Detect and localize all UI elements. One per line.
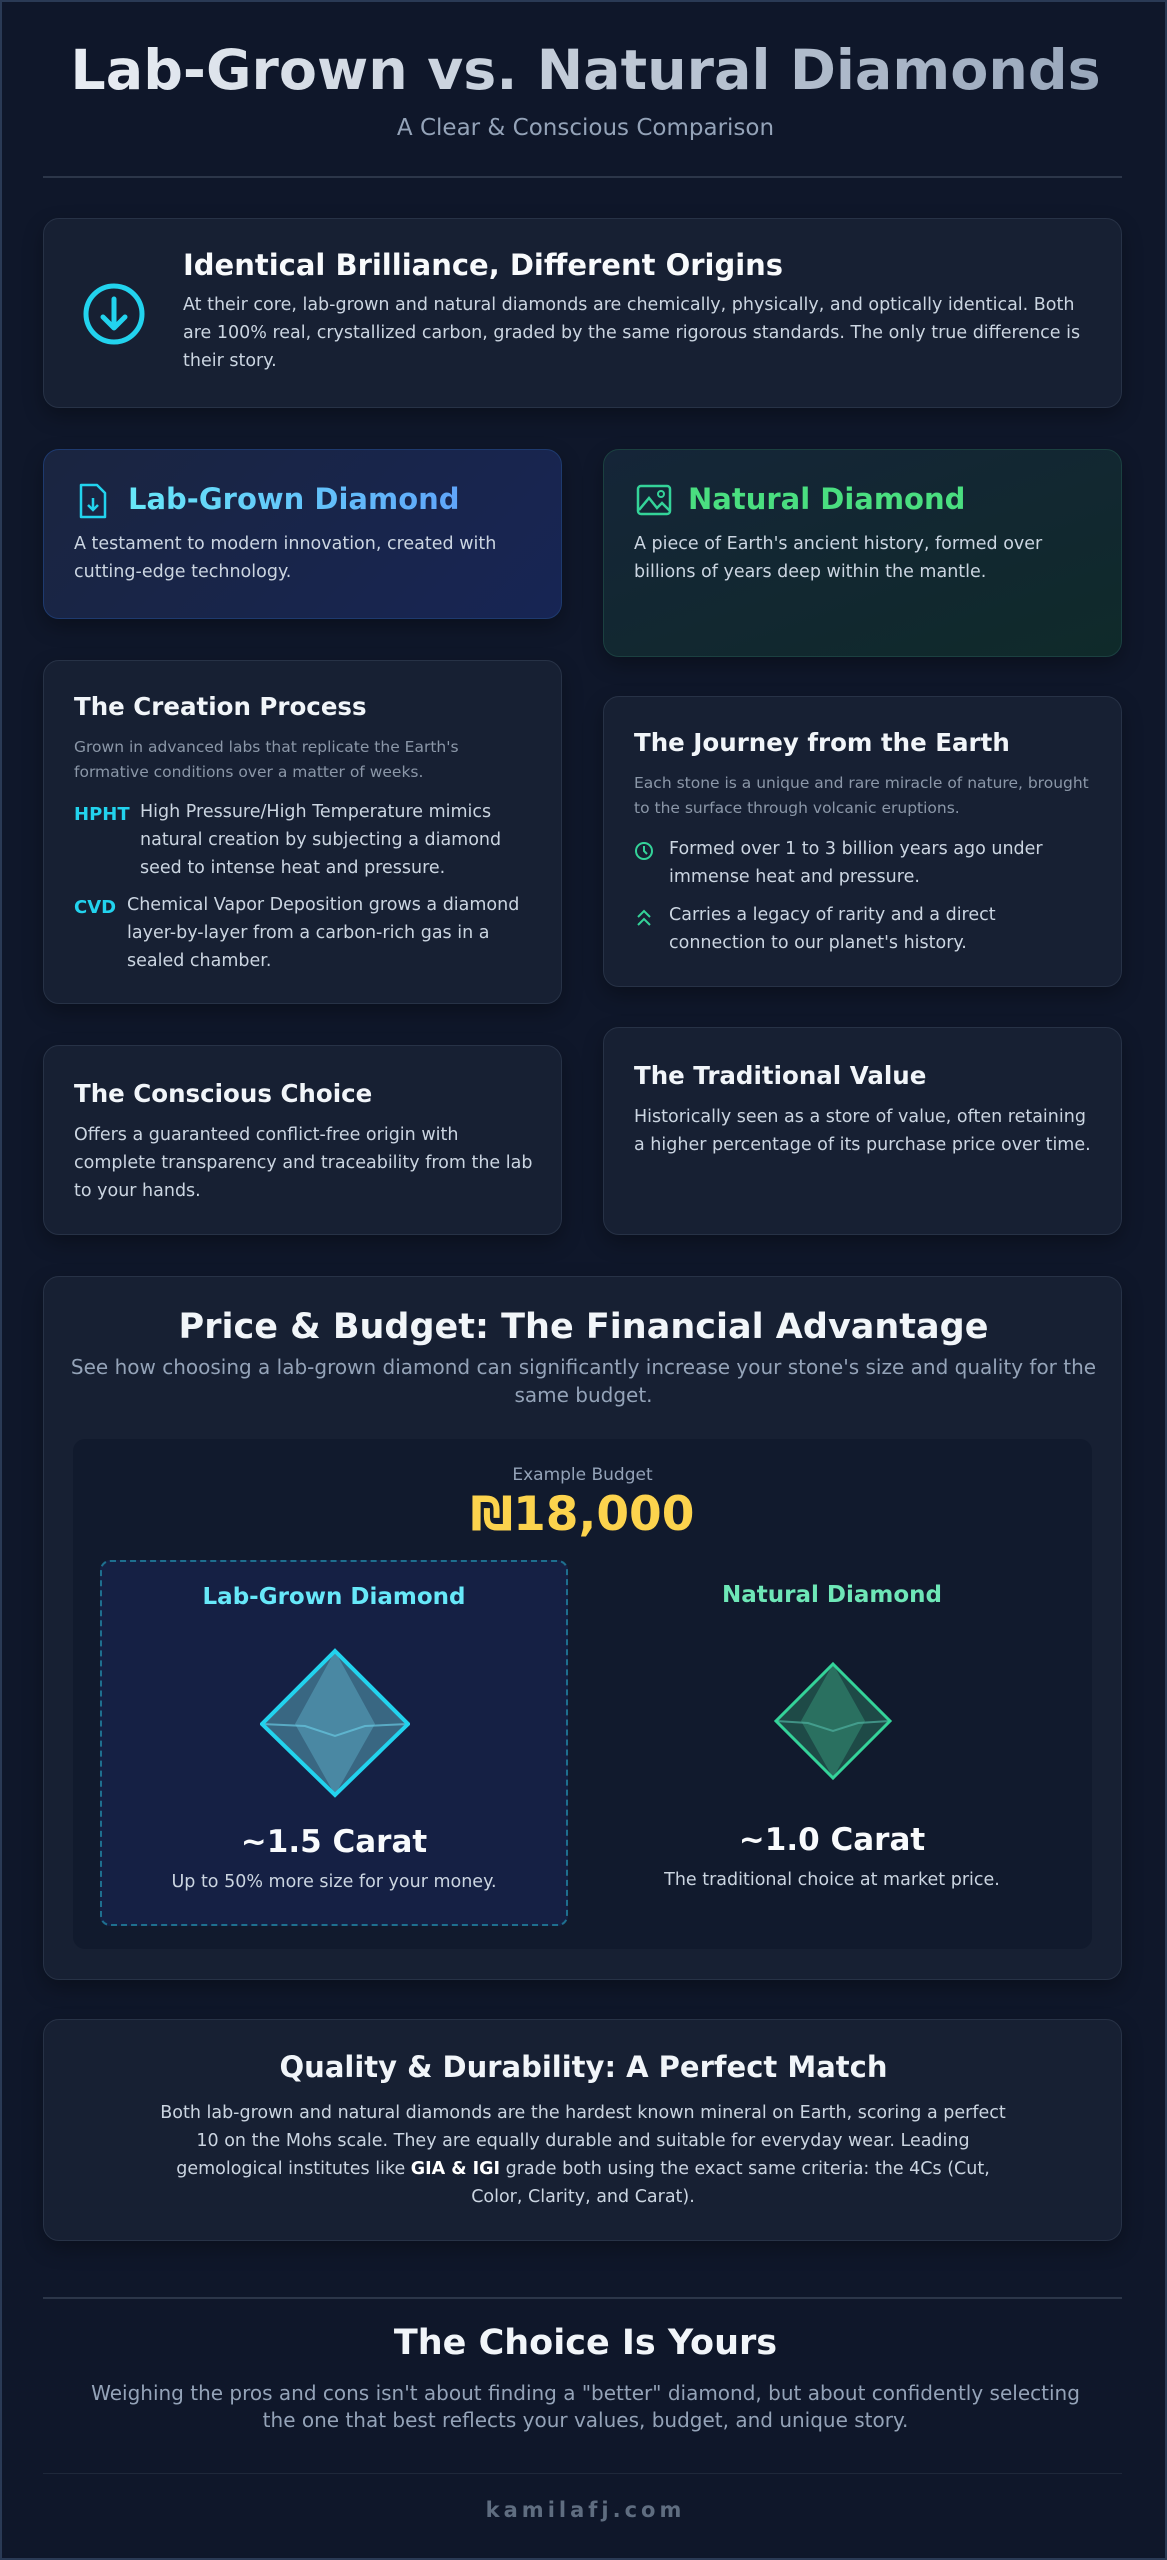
icon: lab diamond — [260, 1648, 410, 1798]
natural heading: Natural Diamond — [688, 482, 965, 516]
icon: down arrow circle — [84, 284, 144, 344]
item: CVD: CVD — [74, 897, 116, 918]
panel: creation process — [43, 660, 562, 1004]
intro text: At their core, lab-grown and natural diamonds are chemically, physically, and optically identical. Both are 100% real, crystallized carbon, graded by the same rigorous standards. The only true difference is their story. — [183, 295, 1080, 371]
panel: lab-grown header — [43, 449, 562, 619]
closing heading: The Choice Is Yours — [394, 2323, 777, 2363]
panel: journey — [603, 696, 1122, 987]
title: Lab-Grown vs. Natural Diamonds — [70, 38, 1101, 103]
item: CVD: Chemical Vapor Deposition grows a diamond layer-by-layer from a carbon-rich gas in a sealed chamber. — [127, 895, 519, 971]
conscious text: Offers a guaranteed conflict-free origin with complete transparency and traceability from the lab to your hands. — [74, 1125, 532, 1201]
item: chevrons: Carries a legacy of rarity and a direct connection to our planet's history. — [669, 905, 996, 953]
option: lab-grown — [100, 1560, 568, 1926]
traditional heading: The Traditional Value — [634, 1061, 926, 1090]
budget amount: ₪18,000 — [471, 1487, 694, 1542]
closing text: Weighing the pros and cons isn't about finding a "better" diamond, but about confidently selecting the one that best reflects your values, budget, and unique story. — [91, 2381, 1080, 2432]
footer brand: kamilafj.com — [486, 2498, 685, 2522]
price subtitle: See how choosing a lab-grown diamond can significantly increase your stone's size and quality for the same budget. — [71, 1355, 1096, 1407]
item: clock: Formed over 1 to 3 billion years ago under immense heat and pressure. — [669, 839, 1043, 887]
panel: price & budget — [43, 1276, 1122, 1980]
icon: image — [636, 484, 672, 516]
option: lab-grown: Lab-Grown Diamond — [203, 1584, 465, 1610]
quality text: Both lab-grown and natural diamonds are the hardest known mineral on Earth, scoring a perfect 10 on the Mohs scale. They are equally durable and suitable for everyday wear. Leading gemological institutes like GIA & IGI grade both using the exact same criteria: the 4Cs (Cut, Color, Clarity, and Carat). — [160, 2103, 1006, 2207]
lab text: A testament to modern innovation, created with cutting-edge technology. — [74, 534, 496, 582]
panel: intro — [43, 218, 1122, 408]
quality heading: Quality & Durability: A Perfect Match — [280, 2050, 887, 2084]
option: natural: Natural Diamond — [722, 1582, 942, 1608]
journey heading: The Journey from the Earth — [634, 728, 1010, 757]
conscious heading: The Conscious Choice — [74, 1079, 372, 1108]
option: natural: ~1.0 Carat — [739, 1822, 925, 1858]
creation subtitle: Grown in advanced labs that replicate the Earth's formative conditions over a matter of weeks. — [74, 738, 459, 781]
lab heading: Lab-Grown Diamond — [128, 482, 460, 516]
icon: file — [80, 484, 106, 518]
natural text: A piece of Earth's ancient history, formed over billions of years deep within the mantle. — [634, 534, 1042, 582]
item: HPHT: HPHT — [74, 804, 130, 825]
creation heading: The Creation Process — [74, 692, 367, 721]
panel: traditional value — [603, 1027, 1122, 1235]
budget label: Example Budget — [512, 1465, 653, 1485]
option: lab-grown: Up to 50% more size for your money. — [171, 1872, 497, 1892]
subtitle: A Clear & Conscious Comparison — [397, 115, 774, 141]
panel: natural header — [603, 449, 1122, 657]
option: natural: The traditional choice at market price. — [664, 1870, 1000, 1890]
panel: conscious choice — [43, 1045, 562, 1235]
price heading: Price & Budget: The Financial Advantage — [179, 1307, 988, 1347]
traditional text: Historically seen as a store of value, often retaining a higher percentage of its purchase price over time. — [634, 1107, 1091, 1155]
journey subtitle: Each stone is a unique and rare miracle of nature, brought to the surface through volcanic eruptions. — [634, 774, 1089, 817]
icon: natural diamond — [774, 1662, 892, 1780]
option: natural — [664, 1582, 1000, 1890]
item: HPHT: High Pressure/High Temperature mimics natural creation by subjecting a diamond seed to intense heat and pressure. — [140, 802, 501, 878]
option: lab-grown: ~1.5 Carat — [241, 1824, 427, 1860]
intro heading: Identical Brilliance, Different Origins — [183, 248, 783, 282]
budget comparison box — [73, 1439, 1092, 1949]
panel: quality & durability — [43, 2019, 1122, 2241]
